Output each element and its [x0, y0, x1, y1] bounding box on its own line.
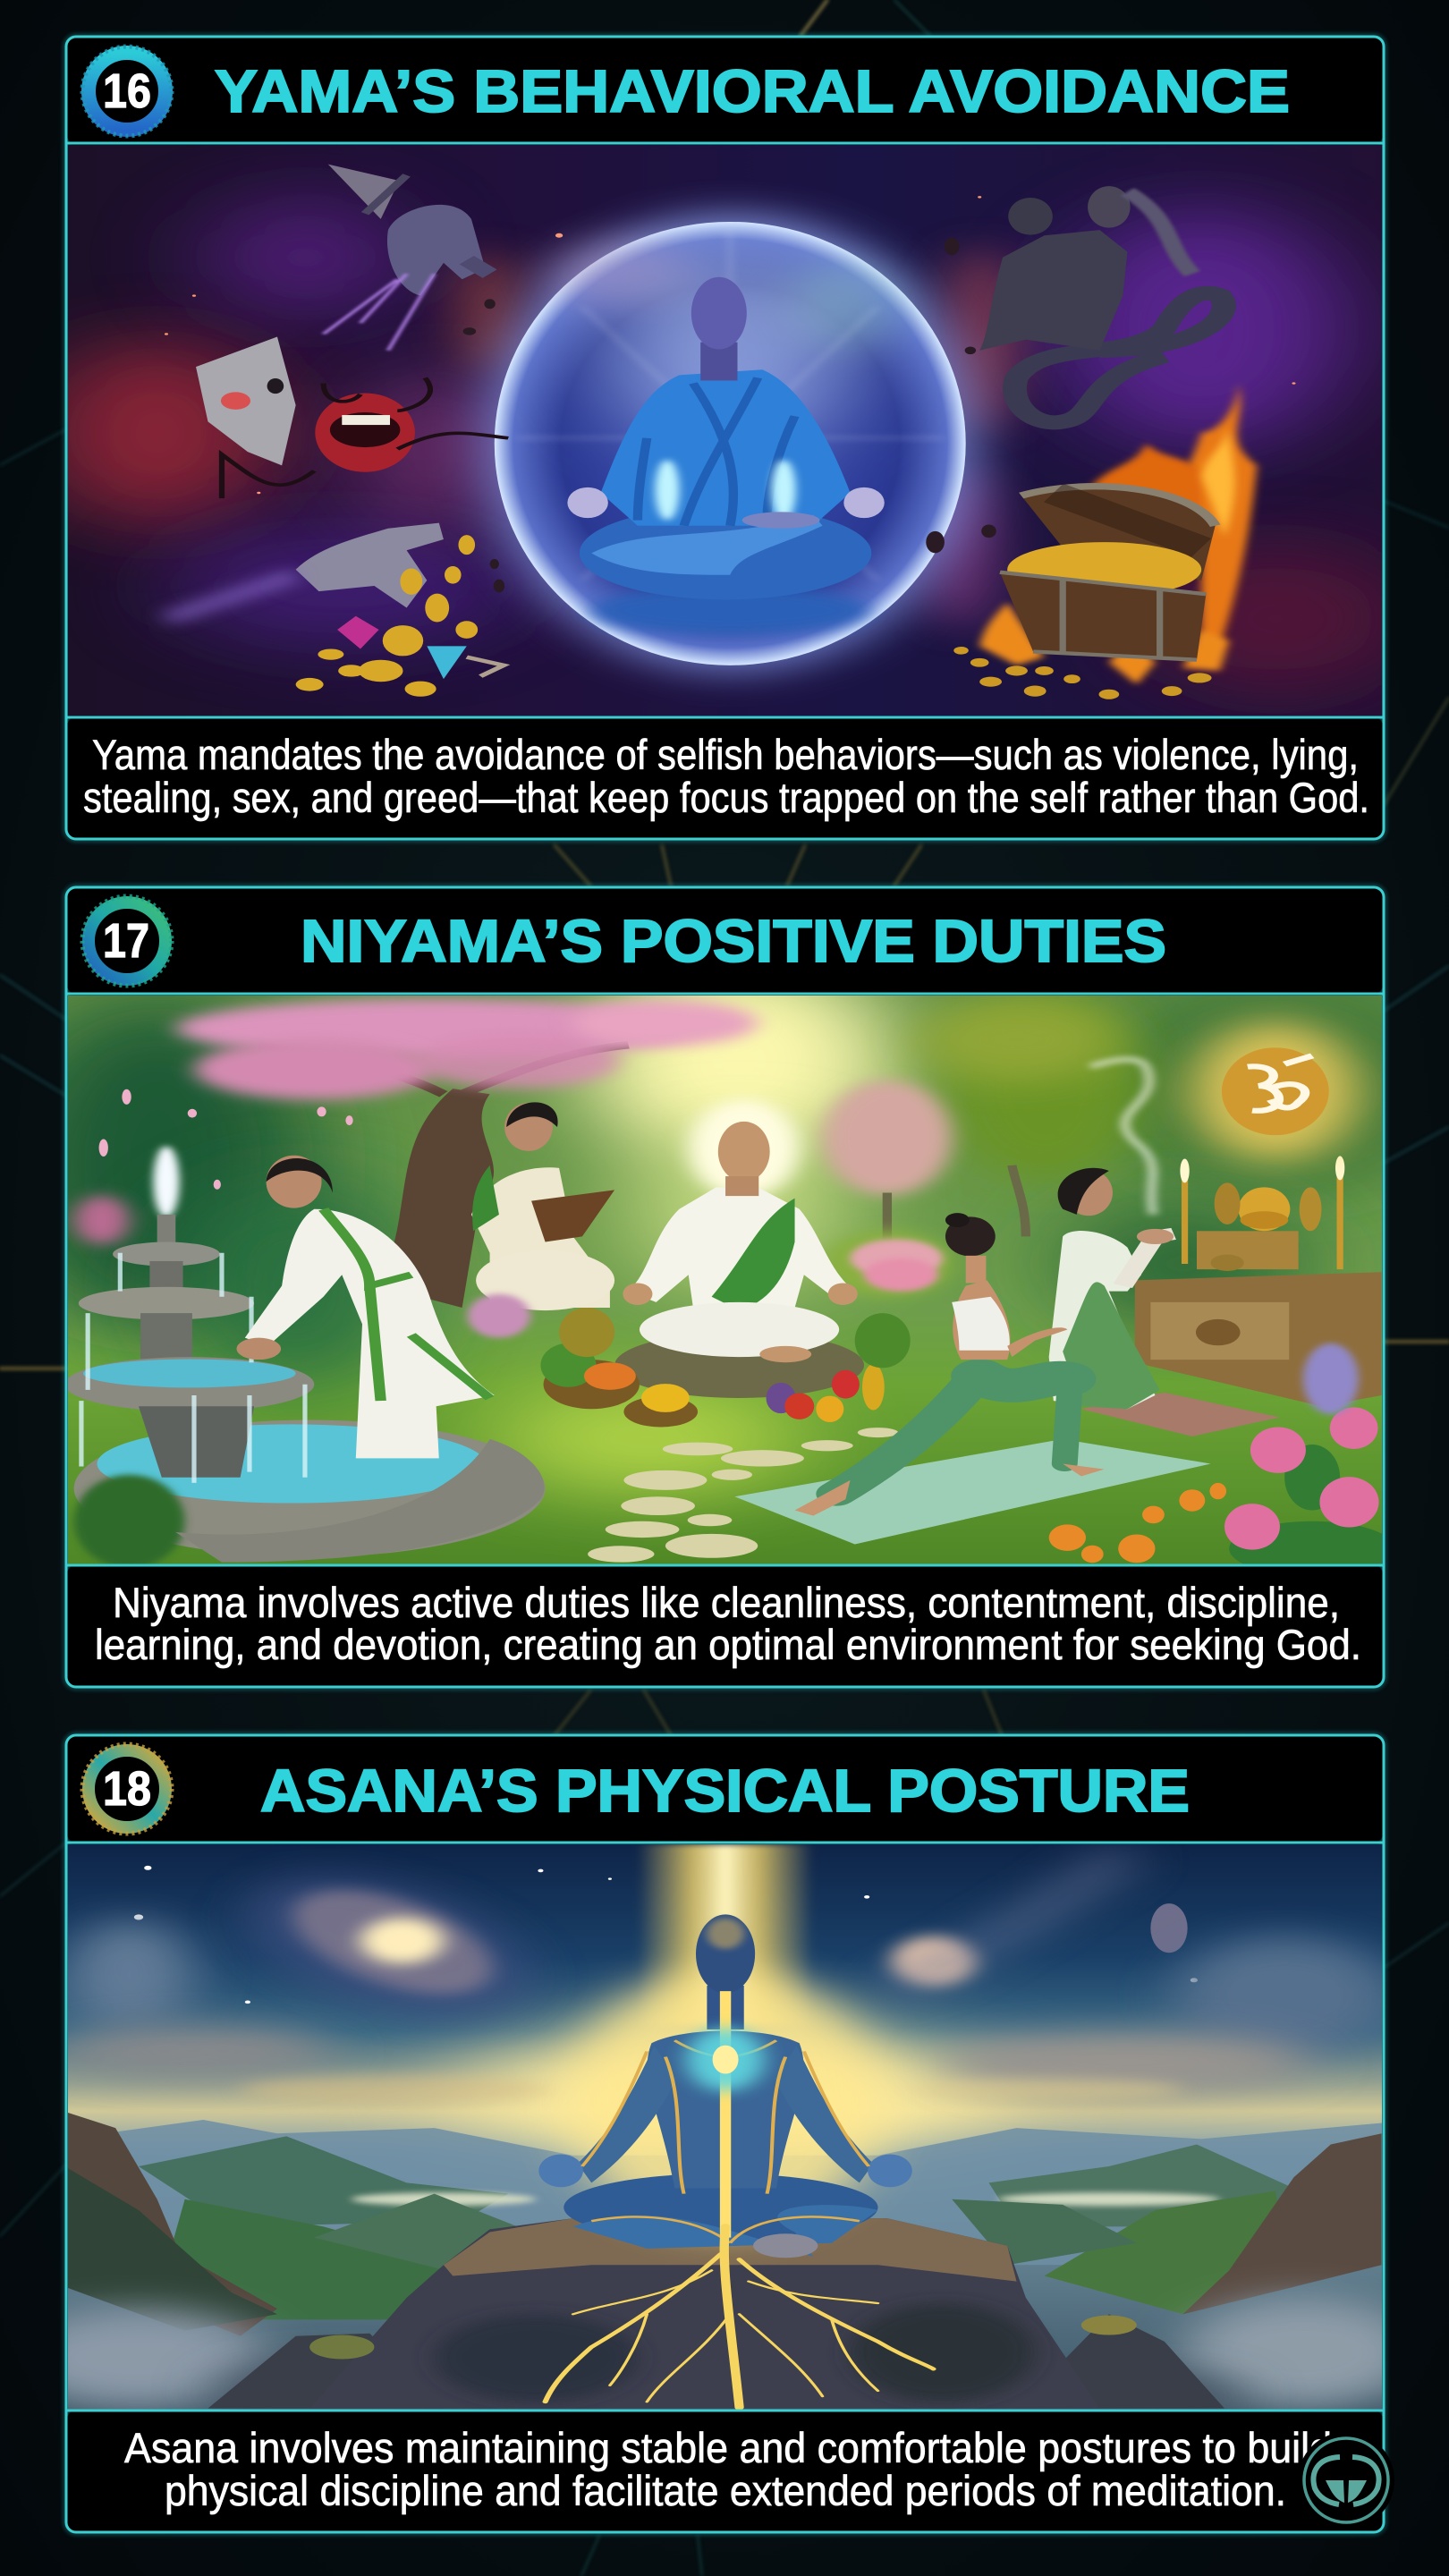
- glowing om symbol: [1188, 1021, 1363, 1163]
- badge 18: 18: [103, 1762, 151, 1816]
- panel: Niyama's positive duties: [0, 887, 1432, 1687]
- burning treasure chest: [953, 384, 1257, 699]
- heading: NIYAMA’S POSITIVE DUTIES: [301, 908, 1166, 975]
- woman reading book: [471, 1102, 614, 1310]
- thorned lips: [222, 377, 508, 498]
- description: Niyama involves active duties like cleanliness, contentment, discipline,: [113, 1579, 1340, 1626]
- badge 17: [82, 896, 172, 986]
- blossom tree: [99, 998, 758, 1308]
- meditating man on stone: [614, 1099, 864, 1398]
- distant mountains: [64, 2120, 1386, 2319]
- rock cliffs: [64, 2112, 1382, 2336]
- panel: Yama's behavioral avoidance: [37, 37, 1414, 839]
- shattered debris: [463, 238, 996, 592]
- nebula clouds: [37, 196, 1414, 695]
- heading bar: [67, 38, 1383, 144]
- description: learning, and devotion, creating an optimal environment for seeking God.: [95, 1621, 1361, 1668]
- woman in lunge pose: [795, 1213, 1105, 1516]
- panel glow frame: [66, 1735, 1384, 2532]
- basin rim: [175, 1439, 544, 1563]
- panel: Asana's physical posture: [9, 1735, 1423, 2532]
- badge 16: 16: [103, 64, 151, 118]
- fountain: [64, 1146, 546, 1557]
- flower beds: [74, 1258, 1395, 1576]
- fruit offerings: [540, 1308, 911, 1427]
- heading bar: [67, 1736, 1383, 1843]
- panel borders: [66, 1735, 1384, 2532]
- panel glow frame: [66, 887, 1384, 1687]
- cracked mask: [196, 337, 296, 465]
- monk: [567, 277, 885, 635]
- grasping hand with coins and gems: [166, 523, 504, 697]
- yoga mat: [734, 1439, 1210, 1544]
- forest and light: [0, 957, 1432, 1494]
- logo watermark: [1298, 2432, 1394, 2529]
- body glow: [568, 1970, 883, 2232]
- panel borders: [66, 37, 1384, 839]
- description: [95, 1579, 1361, 1668]
- lower side peaks: [208, 2314, 1224, 2409]
- golden light beam: [638, 1844, 813, 2025]
- galaxies and planet: [134, 1849, 1198, 2046]
- sphere: [482, 214, 978, 674]
- badge 18: [82, 1744, 172, 1834]
- caption bar: [67, 2411, 1383, 2531]
- panel glow frame: [66, 37, 1384, 839]
- description: [124, 2424, 1332, 2514]
- panel borders: [66, 887, 1384, 1687]
- caption bar: [67, 717, 1383, 838]
- mist: [9, 2298, 1423, 2424]
- description: [83, 731, 1369, 821]
- incense smoke: [1090, 1059, 1153, 1215]
- heading: YAMA’S BEHAVIORAL AVOIDANCE: [215, 58, 1290, 125]
- caption bar: [67, 1565, 1383, 1686]
- description: physical discipline and facilitate extended periods of meditation.: [165, 2467, 1286, 2514]
- illustration: monk in protective sphere surrounded by vices: [37, 142, 1414, 717]
- badge 17: 17: [103, 914, 149, 968]
- dagger fist: [324, 165, 490, 351]
- badge 16: [82, 47, 172, 136]
- description: Asana involves maintaining stable and comfortable postures to build: [124, 2424, 1332, 2471]
- woman washing hands: [236, 1156, 495, 1458]
- kneeling woman with offering: [1049, 1168, 1280, 1436]
- stone path: [588, 1428, 898, 1563]
- illustration: meditating figure on mountain peak under galaxies: [9, 1843, 1423, 2424]
- embracing couple and serpent: [979, 186, 1224, 422]
- altar with statue and candles: [1135, 1156, 1382, 1406]
- illustration: garden scene of duties: [0, 957, 1432, 1576]
- golden roots: [546, 2226, 934, 2407]
- heading: ASANA’S PHYSICAL POSTURE: [260, 1758, 1190, 1825]
- clouds: [55, 1920, 1395, 2104]
- heading bar: [67, 888, 1383, 994]
- rock summit: [309, 2218, 1137, 2409]
- meditating figure with energy lines: [538, 1914, 912, 2258]
